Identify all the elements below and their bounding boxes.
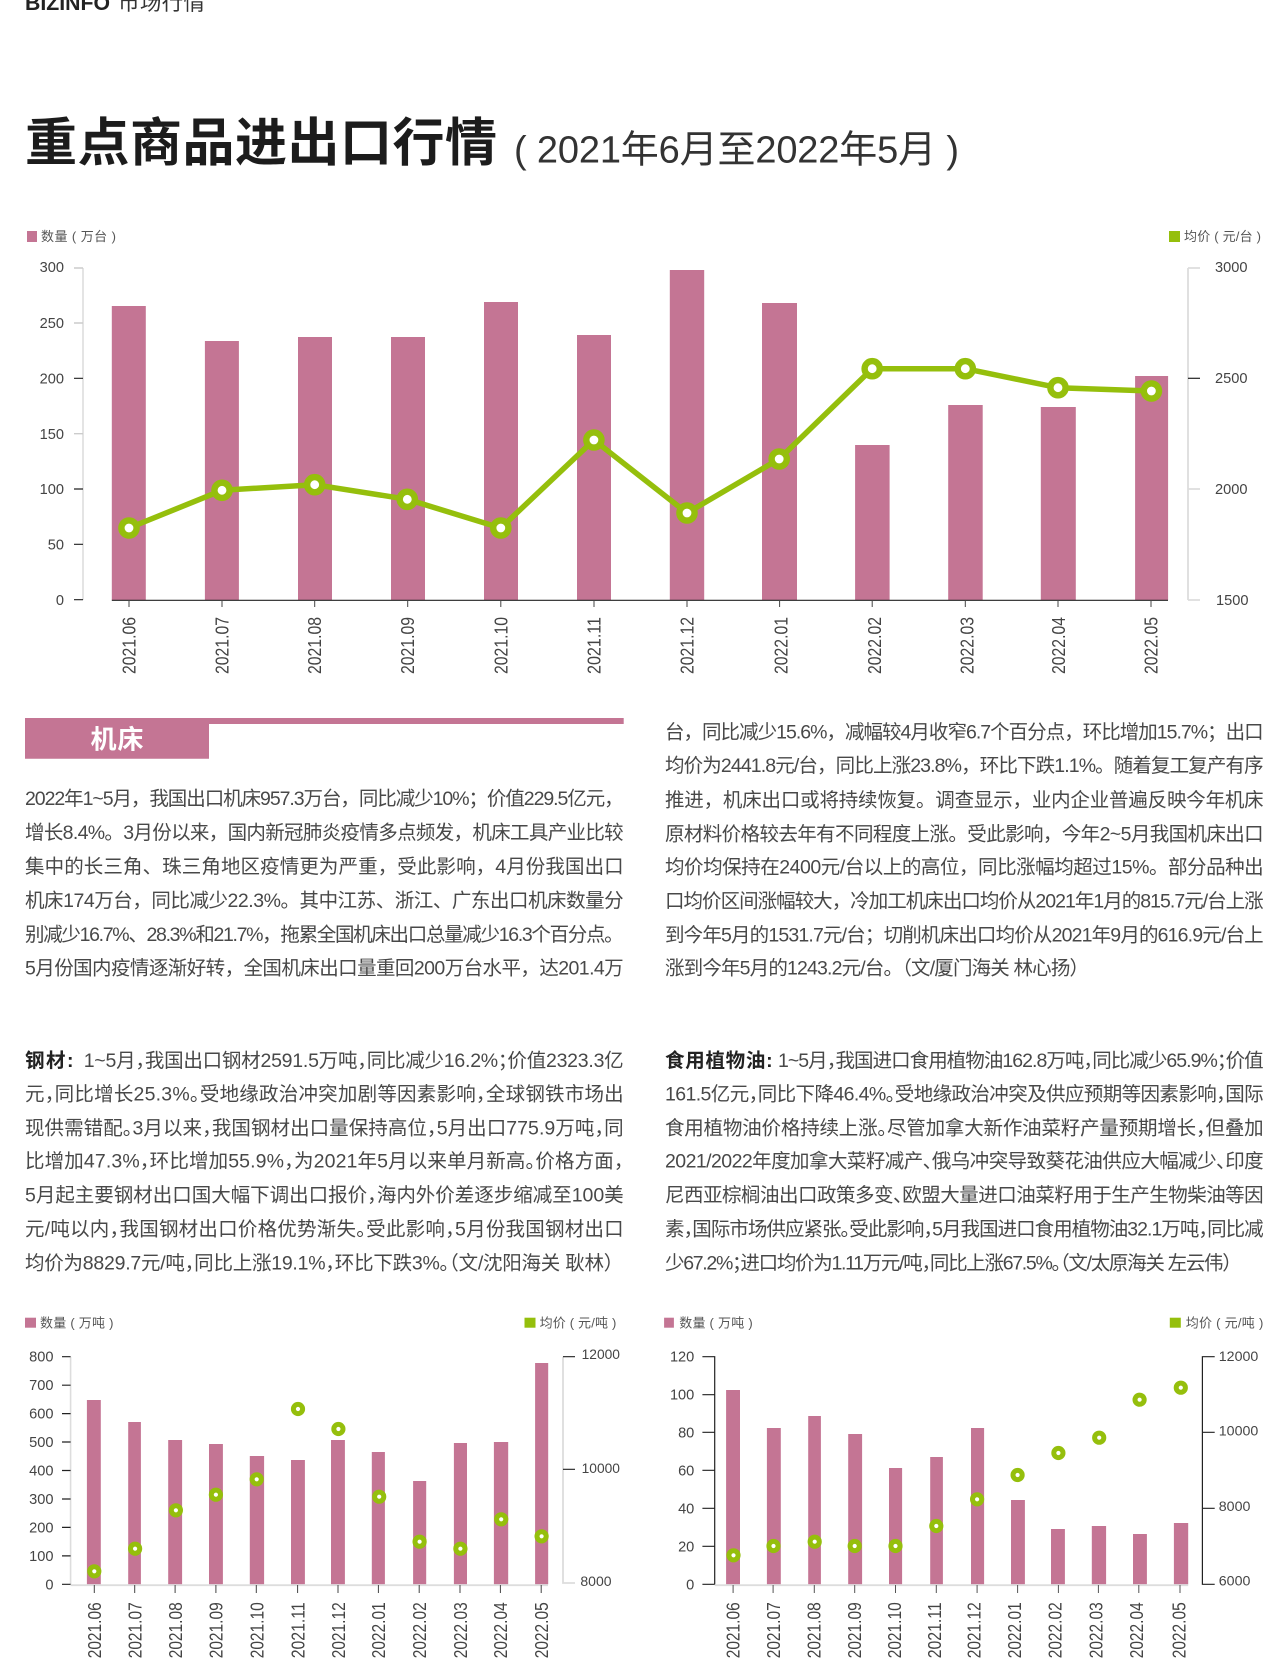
right axis: 10000 <box>582 1461 620 1476</box>
x axis: 2022.04 <box>490 1602 511 1658</box>
x axis: 2021.11 <box>584 617 604 674</box>
text block: machine tools, left column: 5月份国内疫情逐渐好转，全国机床出口量重回200万台水平，达201.4万 <box>25 958 624 980</box>
left axis: 0 <box>45 1577 54 1593</box>
left axis: 120 <box>670 1350 694 1366</box>
x axis: 2022.03 <box>956 617 978 674</box>
legend: quantity: 数量 ( 万吨 ) <box>679 1316 753 1330</box>
right axis: 1500 <box>1216 593 1248 609</box>
legend: average price: 均价 ( 元/吨 ) <box>540 1316 616 1330</box>
x axis: 2021.12 <box>963 1602 984 1658</box>
left axis: 400 <box>29 1464 54 1480</box>
text block: steel: 1~5月，我国出口钢材2591.5万吨，同比减少16.2%；价值2323.3亿 <box>84 1050 624 1072</box>
points: average price <box>90 1404 546 1576</box>
x axis: 2021.10 <box>490 617 511 674</box>
x axis: 2021.09 <box>397 617 418 674</box>
text block: machine tools, right column: 均价为2441.8元/台，同比上涨23.8%，环比下跌1.1%。随着复工复产有序 <box>665 755 1264 777</box>
text block: machine tools, left column <box>25 788 624 980</box>
x axis: 2022.05 <box>1168 1602 1189 1658</box>
x axis: 2022.02 <box>409 1602 430 1658</box>
text block: edible vegetable oil <box>665 1049 1264 1275</box>
text block: machine tools, right column: 推进，机床出口或将持续恢复。调查显示，业内企业普遍反映今年机床 <box>665 789 1264 811</box>
title: 重点商品进出口行情 <box>25 115 497 173</box>
x axis: 2021.08 <box>304 617 325 674</box>
x axis: 2021.07 <box>124 1602 146 1658</box>
left axis: 250 <box>40 316 64 332</box>
right axis: 8000 <box>1219 1499 1250 1515</box>
chart: machine tools <box>27 229 1261 674</box>
text block: steel: 钢材: <box>25 1050 74 1072</box>
text block: steel: 现供需错配。3月以来，我国钢材出口量保持高位，5月出口775.9万吨，同 <box>25 1117 624 1139</box>
text block: edible vegetable oil: 少67.2%；进口均价为1.11万元/吨，同比上涨67.5%。（文/太原海关 左云伟） <box>665 1253 1232 1275</box>
left axis: 100 <box>40 482 64 498</box>
text block: edible vegetable oil: 尼西亚棕榈油出口政策多变、欧盟大量进口油菜籽用于生产生物柴油等因 <box>665 1185 1264 1207</box>
right axis: 12000 <box>582 1347 620 1362</box>
right axis <box>1202 1349 1258 1590</box>
left axis: 50 <box>48 538 64 554</box>
title <box>25 115 959 173</box>
left axis: 300 <box>29 1492 54 1508</box>
line: average price <box>121 361 1159 536</box>
x axis: 2021.11 <box>924 1602 945 1658</box>
text block: machine tools, right column: 原材料价格较去年有不同程度上涨。受此影响，今年2~5月我国机床出口 <box>665 823 1264 845</box>
x axis: 2022.04 <box>1048 617 1069 674</box>
text block: machine tools, right column: 均价均保持在2400元/台以上的高位，同比涨幅均超过15%。部分品种出 <box>665 857 1264 879</box>
left axis: 40 <box>678 1502 694 1518</box>
left axis: 0 <box>686 1577 694 1593</box>
right axis: 10000 <box>1219 1424 1258 1440</box>
text block: steel: 比增加47.3%，环比增加55.9%，为2021年5月以来单月新高。价格方面， <box>25 1151 624 1173</box>
x axis: 2021.06 <box>722 1602 744 1658</box>
x axis: 2021.12 <box>676 617 698 674</box>
left axis: 300 <box>40 260 64 276</box>
x axis: 2022.05 <box>1140 617 1162 674</box>
text block: machine tools, left column: 增长8.4%。3月份以来，国内新冠肺炎疫情多点频发，机床工具产业比较 <box>25 822 624 844</box>
x axis: 2022.01 <box>368 1602 389 1658</box>
x axis: 2022.03 <box>450 1602 471 1658</box>
x axis: 2021.10 <box>884 1602 905 1658</box>
x axis: 2021.09 <box>844 1602 865 1658</box>
right axis <box>1188 260 1248 609</box>
text block: edible vegetable oil: 1~5月，我国进口食用植物油162.8万吨，同比减少65.9%；价值 <box>778 1050 1264 1072</box>
legend: average price: 均价 ( 元/吨 ) <box>1186 1316 1263 1330</box>
right axis: 2000 <box>1215 482 1247 498</box>
x axis: 2022.01 <box>1004 1602 1025 1658</box>
right axis: 6000 <box>1219 1574 1250 1590</box>
left axis: 80 <box>678 1426 694 1442</box>
right axis: 8000 <box>580 1573 612 1589</box>
x axis: 2022.03 <box>1085 1602 1106 1658</box>
left axis: 20 <box>678 1540 694 1556</box>
bars: quantity <box>726 1390 1188 1584</box>
text block: machine tools, right column: 到今年5月的1531.7元/台；切削机床出口均价从2021年9月的616.9元/台上 <box>665 924 1264 946</box>
text block: steel: 元/吨以内，我国钢材出口价格优势渐失。受此影响，5月份我国钢材出口 <box>25 1219 624 1241</box>
left axis: 700 <box>29 1378 54 1394</box>
legend: quantity: 数量 ( 万吨 ) <box>40 1316 114 1330</box>
left axis: 200 <box>29 1520 54 1536</box>
x axis: 2021.07 <box>212 617 232 674</box>
legend: quantity: 数量 ( 万台 ) <box>41 229 116 244</box>
points: average price <box>729 1383 1185 1560</box>
text block: edible vegetable oil: 161.5亿元，同比下降46.4%。受地缘政治冲突及供应预期等因素影响，国际 <box>665 1083 1264 1105</box>
section heading: 机床: 机床 <box>90 724 144 754</box>
left axis: 0 <box>56 593 64 609</box>
x axis: 2022.05 <box>531 1602 552 1658</box>
x axis: 2021.11 <box>288 1602 308 1658</box>
right axis: 12000 <box>1219 1349 1258 1365</box>
x axis: 2021.06 <box>118 617 140 674</box>
left axis: 600 <box>29 1407 54 1423</box>
text block: steel: 均价为8829.7元/吨，同比上涨19.1%，环比下跌3%。（文/沈阳海关 耿林） <box>25 1253 614 1275</box>
bars: quantity <box>112 270 1168 600</box>
left axis: 60 <box>678 1464 694 1480</box>
x axis <box>112 600 1168 674</box>
left axis: 100 <box>29 1549 54 1565</box>
x axis <box>71 1585 552 1658</box>
text block: machine tools, left column: 机床174万台，同比减少22.3%。其中江苏、浙江、广东出口机床数量分 <box>25 890 624 912</box>
header: BIZINFO 市场行情 <box>25 0 205 15</box>
text block: machine tools, right column <box>665 722 1264 980</box>
x axis: 2022.01 <box>770 617 791 674</box>
text block: edible vegetable oil: 食用植物油价格持续上涨。尽管加拿大新作油菜籽产量预期增长，但叠加 <box>665 1116 1264 1139</box>
x axis: 2021.12 <box>328 1602 349 1658</box>
x axis: 2022.04 <box>1126 1602 1147 1658</box>
right axis <box>563 1347 620 1589</box>
text block: steel: 5月起主要钢材出口国大幅下调出口报价，海内外价差逐步缩减至100美 <box>25 1185 624 1207</box>
text block: steel: 元，同比增长25.3%。受地缘政治冲突加剧等因素影响，全球钢铁市场出 <box>25 1083 624 1105</box>
left axis: 500 <box>29 1435 54 1451</box>
bars: quantity <box>87 1363 548 1584</box>
left axis: 150 <box>40 427 64 443</box>
section heading: 机床 <box>25 718 624 759</box>
text block: edible vegetable oil: 2021/2022年度加拿大菜籽减产、俄乌冲突导致葵花油供应大幅减少、印度 <box>665 1150 1264 1173</box>
title: ( 2021年6月至2022年5月 ) <box>514 130 959 172</box>
text block: edible vegetable oil: 素，国际市场供应紧张。受此影响，5月我国进口食用植物油32.1万吨，同比减 <box>665 1219 1264 1241</box>
x axis: 2022.02 <box>1045 1602 1066 1658</box>
chart: edible vegetable oil <box>664 1316 1263 1658</box>
x axis: 2022.02 <box>864 617 885 674</box>
x axis: 2021.06 <box>84 1602 105 1658</box>
x axis: 2021.08 <box>165 1602 186 1658</box>
left axis: 100 <box>670 1388 694 1404</box>
x axis <box>715 1585 1189 1658</box>
chart: steel <box>25 1316 620 1658</box>
text block: machine tools, right column: 台，同比减少15.6%，减幅较4月收窄6.7个百分点，环比增加15.7%；出口 <box>665 722 1264 744</box>
left axis: 800 <box>29 1350 54 1366</box>
legend: average price: 均价 ( 元/台 ) <box>1184 229 1261 244</box>
text block: machine tools, right column: 口均价区间涨幅较大，冷加工机床出口均价从2021年1月的815.7元/台上涨 <box>665 891 1264 913</box>
left axis: 200 <box>40 372 64 388</box>
x axis: 2021.07 <box>763 1602 784 1658</box>
right axis: 3000 <box>1215 260 1247 276</box>
left axis <box>670 1350 715 1593</box>
left axis <box>40 260 83 609</box>
text block: machine tools, left column: 集中的长三角、珠三角地区疫情更为严重，受此影响，4月份我国出口 <box>25 856 624 878</box>
x axis: 2021.08 <box>803 1602 824 1658</box>
text block: machine tools, left column: 别减少16.7%、28.3%和21.7%，拖累全国机床出口总量减少16.3个百分点。 <box>25 924 624 946</box>
x axis: 2021.09 <box>206 1602 226 1658</box>
x axis: 2021.10 <box>246 1602 268 1658</box>
text block: machine tools, right column: 涨到今年5月的1243.2元/台。（文/厦门海关 林心扬） <box>665 958 1089 980</box>
right axis: 2500 <box>1215 371 1247 387</box>
left axis <box>29 1350 71 1593</box>
text block: steel <box>25 1050 624 1275</box>
text block: edible vegetable oil: 食用植物油: <box>665 1049 773 1072</box>
text block: machine tools, left column: 2022年1~5月，我国出口机床957.3万台，同比减少10%；价值229.5亿元， <box>25 788 624 810</box>
